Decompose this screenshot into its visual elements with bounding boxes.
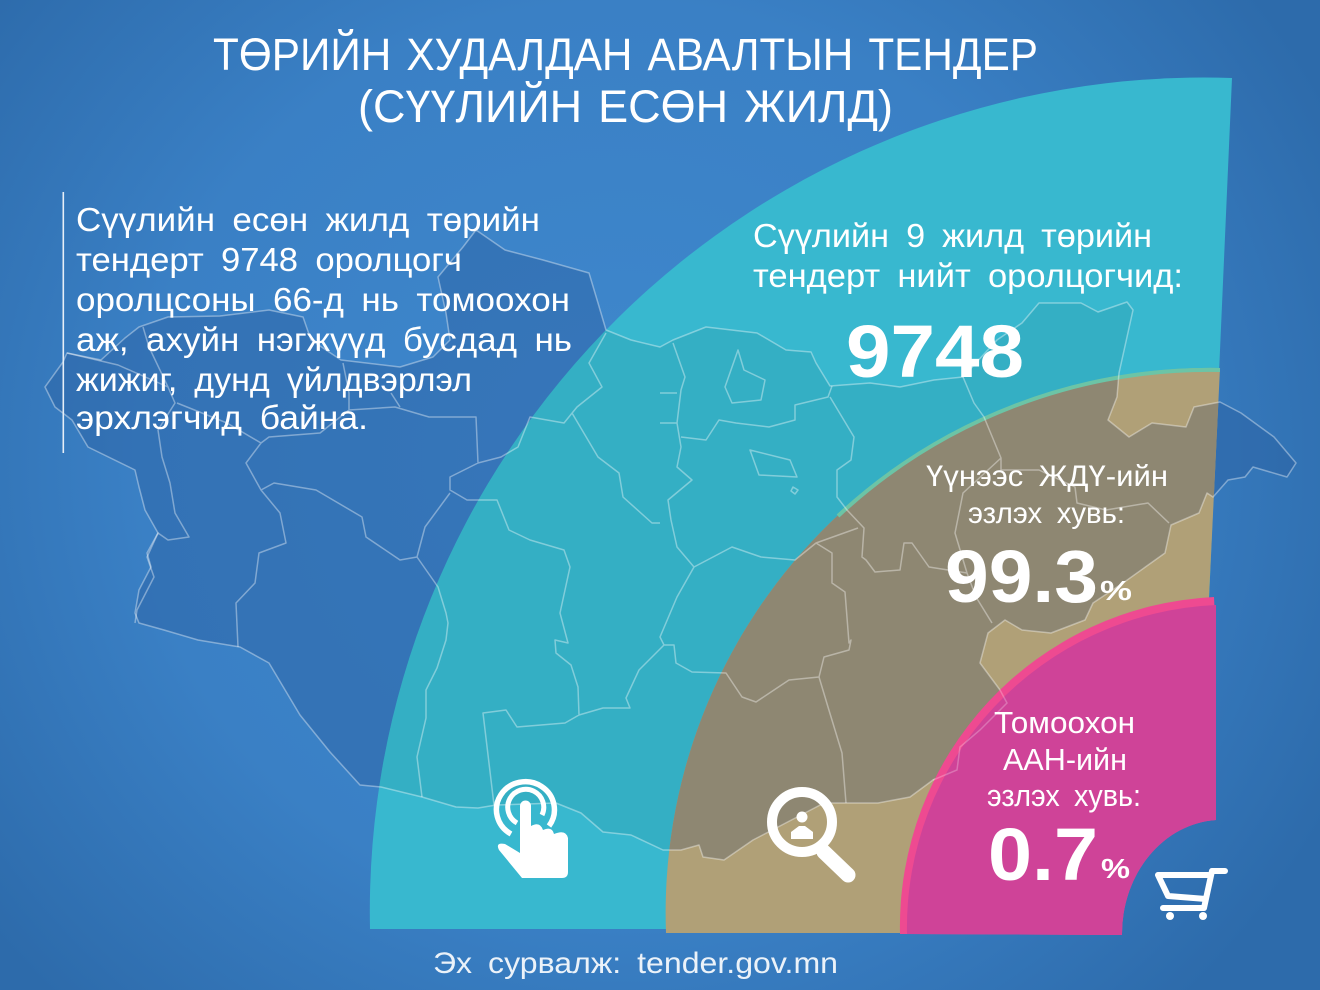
source: Эх сурвалж: tender.gov.mn bbox=[433, 947, 838, 980]
text block: summary: эрхлэгчид байна. bbox=[76, 399, 368, 436]
number: 0.7%: 0.7 bbox=[988, 813, 1098, 896]
text block: summary: оролцсоны 66-д нь томоохон bbox=[76, 281, 570, 318]
text: large enterprise share label bbox=[987, 705, 1141, 813]
text block: summary: тендерт 9748 оролцогч bbox=[76, 241, 462, 278]
text: total participants label: тендерт нийт оролцогчид: bbox=[753, 257, 1183, 294]
text block: summary: жижиг, дунд үйлдвэрлэл bbox=[76, 361, 472, 398]
title: ТӨРИЙН ХУДАЛДАН АВАЛТЫН ТЕНДЕР bbox=[213, 29, 1038, 80]
text: SME share label bbox=[926, 460, 1168, 530]
text: total participants label: Сүүлийн 9 жилд төрийн bbox=[753, 217, 1152, 254]
number: 9748: 9748 bbox=[846, 310, 1024, 393]
number: 99.3%: % bbox=[1100, 575, 1132, 606]
text block: summary: аж, ахуйн нэгжүүд бусдад нь bbox=[76, 321, 572, 358]
map of Mongolia: base fill bbox=[45, 230, 1296, 860]
title bbox=[213, 29, 1038, 132]
panel: large enterprise share fan bbox=[900, 597, 1216, 935]
text: large enterprise share label: Томоохон bbox=[994, 705, 1135, 740]
tan fan highlight edge bbox=[838, 370, 1220, 516]
vertical rule beside summary bbox=[62, 192, 64, 453]
panel: total participants fan bbox=[370, 78, 1232, 929]
number: 0.7%: % bbox=[1101, 853, 1130, 884]
text block: summary bbox=[76, 201, 572, 436]
icon: magnifier with person bbox=[772, 792, 848, 875]
number: 99.3%: 99.3 bbox=[945, 535, 1098, 618]
text: SME share label: Үүнээс ЖДҮ-ийн bbox=[926, 460, 1168, 493]
icon: shopping cart bbox=[1158, 871, 1225, 920]
text: SME share label: эзлэх хувь: bbox=[968, 497, 1125, 530]
map tint on tan fan bbox=[669, 380, 1218, 860]
faint map border on pink bbox=[933, 690, 1007, 780]
text: large enterprise share label: эзлэх хувь: bbox=[987, 778, 1141, 813]
map tint on teal fan bbox=[380, 303, 1132, 850]
title: (СҮҮЛИЙН ЕСӨН ЖИЛД) bbox=[358, 81, 893, 132]
text: total participants label bbox=[753, 217, 1183, 294]
text: large enterprise share label: ААН-ийн bbox=[1003, 742, 1127, 777]
panel: SME share fan bbox=[666, 368, 1220, 933]
text block: summary: Сүүлийн есөн жилд төрийн bbox=[76, 201, 540, 238]
icon: tapping hand bbox=[496, 782, 568, 878]
map borders bbox=[45, 230, 1296, 860]
